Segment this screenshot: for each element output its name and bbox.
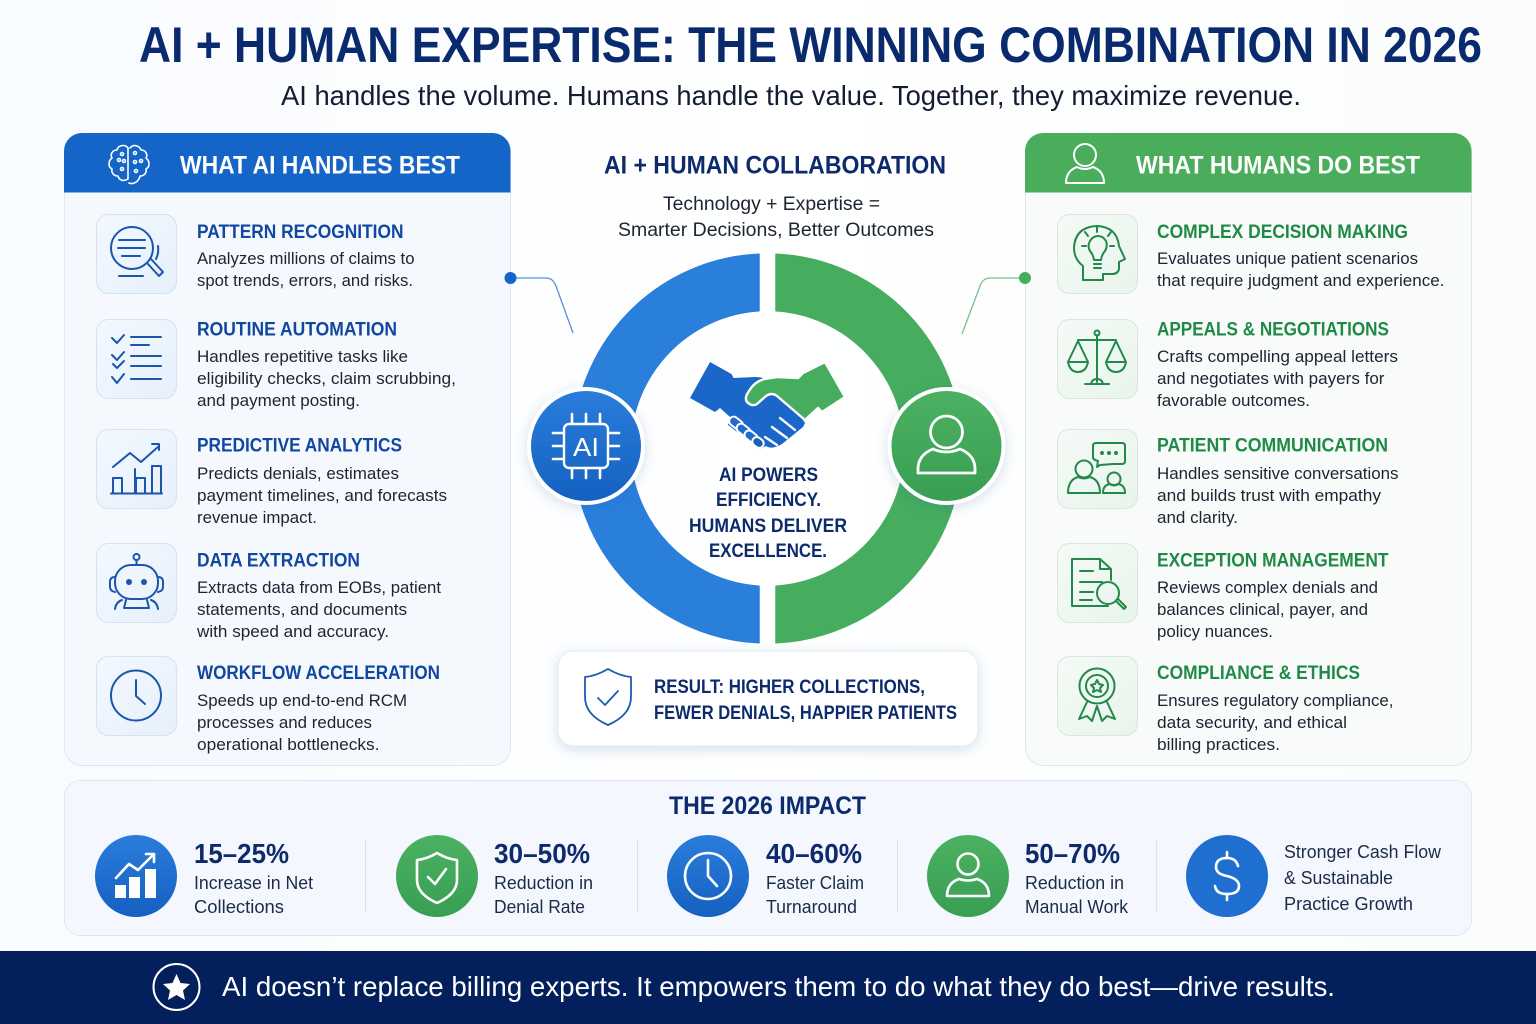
badge: AI chip — [529, 389, 643, 503]
text: data extraction: statements, and documents — [197, 601, 407, 619]
text: routine automation: and payment posting. — [197, 392, 360, 410]
item: appeals and negotiations — [1058, 320, 1398, 410]
stat text: manual work: Reduction in — [1025, 873, 1124, 893]
subtitle: AI handles the volume. Humans handle the value. Together, they maximize revenue. — [281, 80, 1301, 111]
text: compliance and ethics: data security, and ethical — [1157, 714, 1347, 732]
text: exception management: policy nuances. — [1157, 623, 1273, 641]
panel: what humans do best — [1025, 133, 1472, 766]
stat text: net collections: Collections — [194, 897, 284, 917]
text: compliance and ethics: Ensures regulatory compliance, — [1157, 692, 1394, 710]
item: pattern recognition — [96, 214, 414, 294]
panel header: AI — [64, 133, 510, 192]
stat text: claim turnaround: Turnaround — [766, 897, 857, 917]
connector: AI panel to ring — [504, 272, 573, 333]
stat: cash flow — [1186, 835, 1442, 917]
result text: RESULT: HIGHER COLLECTIONS, — [654, 677, 925, 698]
stat text: net collections: 15–25% — [194, 838, 289, 869]
text: pattern recognition: spot trends, errors, and risks. — [197, 272, 413, 290]
stat text: denial rate: 30–50% — [494, 838, 590, 869]
stat text: denial rate: Denial Rate — [494, 897, 585, 917]
text: routine automation: Handles repetitive tasks like — [197, 348, 408, 366]
icon: brain — [109, 146, 149, 184]
result text: FEWER DENIALS, HAPPIER PATIENTS — [654, 703, 957, 724]
text: data extraction — [196, 550, 441, 641]
stat text: manual work: Manual Work — [1025, 897, 1129, 917]
text: predictive analytics — [197, 436, 447, 527]
stat: denial rate — [396, 835, 593, 917]
text: exception management: balances clinical, payer, and — [1157, 601, 1368, 619]
center message: HUMANS DELIVER — [689, 515, 847, 537]
item: workflow acceleration — [96, 656, 440, 754]
connector: humans panel to ring — [962, 272, 1031, 334]
text: data extraction: Extracts data from EOBs, patient — [197, 579, 441, 597]
text: patient communication: and builds trust with empathy — [1157, 487, 1382, 505]
text: patient communication — [1157, 436, 1398, 527]
text: complex decision making — [1157, 222, 1444, 290]
item: patient communication — [1058, 430, 1398, 527]
text: compliance and ethics — [1157, 663, 1394, 754]
header title: humans: WHAT HUMANS DO BEST — [1136, 152, 1420, 180]
icon: clock — [667, 835, 749, 917]
text: data extraction: with speed and accuracy. — [196, 623, 389, 641]
text: appeals and negotiations: favorable outcomes. — [1157, 392, 1310, 410]
stat: net collections — [95, 835, 313, 917]
item: complex decision making — [1058, 214, 1444, 294]
panel header: humans — [1025, 133, 1472, 192]
icon: checklist — [96, 320, 176, 398]
text: appeals and negotiations: and negotiates with payers for — [1157, 370, 1385, 388]
icon: robot — [96, 544, 176, 622]
stat text: net collections: Increase in Net — [194, 873, 313, 893]
icon: person — [927, 835, 1009, 917]
callout: result — [558, 651, 978, 746]
item: predictive analytics — [96, 430, 447, 527]
text: complex decision making: that require judgment and experience. — [1157, 272, 1444, 290]
text: workflow acceleration: Speeds up end-to-end RCM — [197, 692, 407, 710]
icon: person — [1066, 144, 1104, 183]
icon: shield — [396, 835, 478, 917]
icon: growth chart — [96, 430, 176, 508]
text: predictive analytics: revenue impact. — [197, 509, 317, 527]
stat text: claim turnaround — [766, 838, 864, 917]
stat: manual work — [927, 835, 1129, 917]
badge: AI chip: AI — [573, 432, 599, 462]
icon: award ribbon — [1058, 656, 1138, 736]
text: routine automation: eligibility checks, claim scrubbing, — [197, 370, 456, 388]
center subheading: Smarter Decisions, Better Outcomes — [618, 219, 934, 241]
item: routine automation — [96, 320, 456, 410]
icon: magnifier — [96, 214, 176, 294]
icon: star badge — [154, 964, 200, 1010]
stat: claim turnaround — [667, 835, 864, 917]
stat text: manual work — [1025, 838, 1129, 917]
stat text: cash flow — [1284, 842, 1442, 914]
panel: what AI handles best — [64, 133, 510, 766]
text: pattern recognition — [197, 222, 414, 290]
stat text: net collections — [194, 838, 313, 917]
text: complex decision making: Evaluates unique patient scenarios — [1157, 250, 1418, 268]
stat text: denial rate: Reduction in — [494, 873, 593, 893]
text: workflow acceleration: operational bottlenecks. — [197, 736, 380, 754]
icon: clock — [96, 656, 176, 736]
ring: human half — [776, 254, 962, 643]
badge: human — [890, 389, 1004, 503]
text: appeals and negotiations — [1157, 320, 1398, 410]
text: exception management: Reviews complex denials and — [1157, 579, 1378, 597]
item: data extraction — [96, 544, 441, 641]
text: complex decision making: COMPLEX DECISION MAKING — [1157, 222, 1408, 243]
center heading: AI + HUMAN COLLABORATION — [604, 152, 946, 180]
center message: EXCELLENCE. — [709, 540, 827, 562]
center message: AI POWERS — [719, 464, 818, 486]
header title: AI: WHAT AI HANDLES BEST — [180, 152, 460, 180]
icon: head with lightbulb — [1058, 214, 1138, 294]
text: compliance and ethics: COMPLIANCE & ETHICS — [1157, 663, 1360, 684]
text: routine automation: ROUTINE AUTOMATION — [197, 320, 397, 340]
stat text: denial rate — [494, 838, 593, 917]
text: pattern recognition: PATTERN RECOGNITION — [197, 222, 404, 243]
stat text: cash flow: & Sustainable — [1284, 868, 1393, 888]
text: exception management — [1157, 550, 1389, 641]
center subheading — [618, 193, 934, 241]
item: exception management — [1058, 544, 1389, 641]
text: predictive analytics: Predicts denials, estimates — [197, 465, 399, 483]
stat text: claim turnaround: 40–60% — [766, 838, 862, 869]
text: predictive analytics: payment timelines, and forecasts — [197, 487, 447, 505]
text: workflow acceleration — [197, 663, 440, 754]
center message: EFFICIENCY. — [716, 489, 821, 511]
text: appeals and negotiations: Crafts compelling appeal letters — [1157, 348, 1398, 366]
stat text: claim turnaround: Faster Claim — [766, 873, 864, 893]
icon: chart up — [95, 835, 177, 917]
icon: document with magnifier — [1058, 544, 1138, 622]
text: predictive analytics: PREDICTIVE ANALYTICS — [197, 436, 402, 456]
footer banner — [0, 951, 1536, 1024]
item: compliance and ethics — [1058, 656, 1394, 754]
icon: dollar — [1186, 835, 1268, 917]
impact heading: THE 2026 IMPACT — [669, 792, 866, 820]
icon: people talking — [1058, 430, 1138, 508]
footer message: AI doesn’t replace billing experts. It empowers them to do what they do best—drive results. — [222, 971, 1335, 1002]
text: patient communication: PATIENT COMMUNICATION — [1157, 436, 1388, 456]
text: data extraction: DATA EXTRACTION — [197, 550, 360, 572]
text: appeals and negotiations: APPEALS & NEGOTIATIONS — [1157, 320, 1389, 340]
text: patient communication: and clarity. — [1157, 509, 1238, 527]
text: patient communication: Handles sensitive conversations — [1157, 465, 1398, 483]
panel: the 2026 impact — [64, 780, 1472, 936]
icon: scales — [1058, 320, 1138, 398]
center message — [689, 464, 847, 562]
stat text: manual work: 50–70% — [1025, 838, 1120, 869]
stat text: cash flow: Practice Growth — [1284, 894, 1413, 914]
text: pattern recognition: Analyzes millions of claims to — [197, 250, 414, 268]
text: workflow acceleration: processes and reduces — [197, 714, 372, 732]
text: workflow acceleration: WORKFLOW ACCELERATION — [197, 663, 440, 684]
icon: shield check — [585, 669, 631, 725]
center subheading: Technology + Expertise = — [663, 193, 880, 215]
ring: AI half — [573, 254, 759, 643]
stat text: cash flow: Stronger Cash Flow — [1284, 842, 1442, 862]
icon: handshake — [690, 362, 845, 450]
result text — [654, 677, 957, 724]
text: compliance and ethics: billing practices. — [1157, 736, 1280, 754]
text: routine automation — [197, 320, 456, 410]
text: exception management: EXCEPTION MANAGEMENT — [1157, 550, 1389, 572]
